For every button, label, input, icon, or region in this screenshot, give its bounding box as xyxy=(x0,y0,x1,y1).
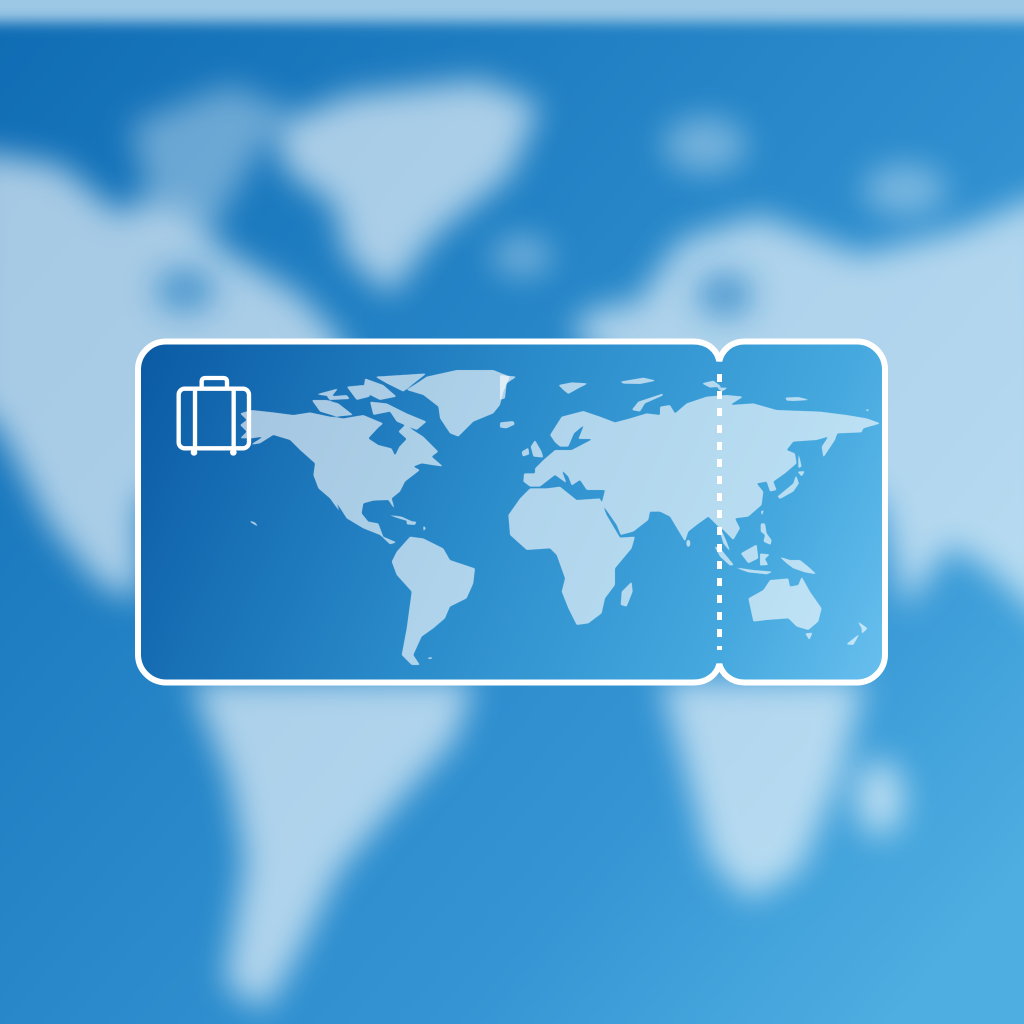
ticket shape xyxy=(138,342,885,682)
ticket perforation line xyxy=(717,374,722,650)
faint blurred islands xyxy=(130,85,947,276)
Tasmania xyxy=(805,633,813,640)
Falklands and small Pacific islands xyxy=(249,520,474,665)
New Guinea xyxy=(779,557,817,574)
New Zealand xyxy=(846,621,868,645)
world map: Americas and Greenland xyxy=(240,370,510,665)
Sakhalin and Japan xyxy=(777,452,805,499)
top light band xyxy=(0,0,1024,22)
British Isles xyxy=(522,440,543,458)
Canadian Arctic islands xyxy=(312,373,427,430)
Taiwan and Philippines xyxy=(761,510,772,545)
Eurasia xyxy=(523,395,881,552)
world map: Europe, Africa, Asia, Oceania xyxy=(500,375,881,645)
Australia xyxy=(748,577,822,630)
Sri Lanka xyxy=(686,540,690,547)
Iceland and Greenland tip xyxy=(500,375,517,428)
suitcase icon xyxy=(179,378,249,454)
North America xyxy=(240,410,443,544)
Greenland xyxy=(407,370,510,437)
Africa xyxy=(508,487,635,625)
Madagascar xyxy=(621,582,633,607)
Novaya Zemlya xyxy=(632,393,663,412)
Caribbean islands xyxy=(386,514,426,532)
ticket outline xyxy=(138,342,885,682)
South America xyxy=(392,537,475,665)
Arctic islands xyxy=(558,378,869,411)
blurred dark seas xyxy=(155,268,753,317)
Southeast Asian islands xyxy=(714,544,773,574)
